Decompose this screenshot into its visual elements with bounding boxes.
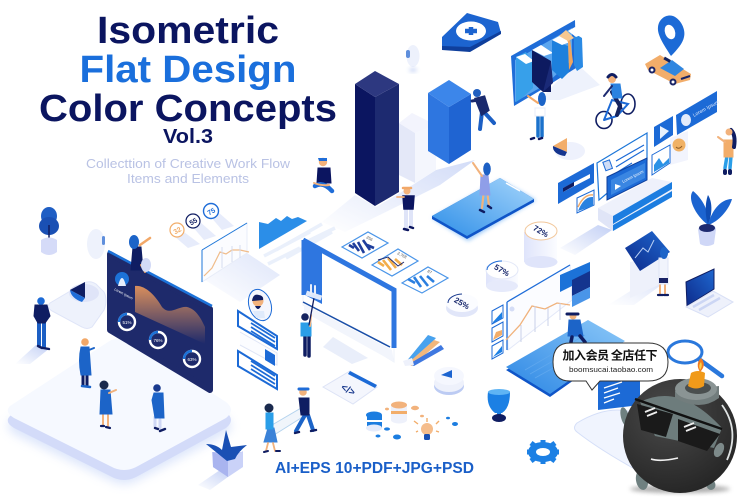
badge 32: 32 [173, 226, 183, 236]
pie chart top [553, 138, 585, 160]
chart board [492, 262, 590, 359]
title block [39, 10, 337, 186]
book orange [559, 30, 574, 70]
phone platform [432, 178, 536, 241]
sunglasses [635, 399, 722, 451]
icon: trophy cup [488, 389, 510, 422]
stat cards [342, 232, 448, 293]
blue bar [428, 80, 471, 164]
dial 2: 76% [153, 338, 163, 343]
comment cards [238, 311, 277, 389]
percent cylinder 57 [486, 261, 518, 292]
desk cabinet [560, 178, 672, 255]
card lower [238, 351, 277, 389]
kiosk chart [608, 231, 670, 305]
figure: man pushing bar [472, 89, 494, 129]
plant right [691, 191, 732, 246]
cap [675, 378, 719, 405]
heading: Isometric: Isometric [97, 10, 279, 52]
badge 75: 75 [207, 207, 217, 217]
mountain chart [259, 216, 335, 264]
badge 55: 55 [189, 217, 199, 227]
tiles right [560, 262, 590, 307]
lower-right platform [574, 378, 680, 472]
figure: man with hat [567, 312, 585, 342]
card upper [238, 311, 277, 349]
cylinder orange [391, 402, 407, 424]
white text card [597, 133, 647, 200]
figure: woman on phone [473, 162, 491, 212]
icon: cup-shaped tree left [39, 207, 59, 255]
dashboard platform [8, 338, 231, 484]
feet and ears [619, 406, 716, 491]
avatar: Lorem Ipsum [114, 287, 134, 301]
card 2: 2,768 [397, 250, 408, 260]
book 1 [516, 52, 534, 102]
heading: Color Concepts: Color Concepts [39, 88, 337, 130]
man [295, 388, 316, 433]
figure: woman atop dashboard [129, 235, 151, 272]
figure: cyclist [596, 74, 635, 128]
dial 3: 63% [187, 357, 197, 362]
heading: Vol.3: Vol.3 [163, 126, 213, 148]
percent cylinder 57: 57% [493, 263, 511, 278]
icon: gear [527, 440, 559, 464]
monitor stand [323, 337, 368, 364]
woman [264, 404, 280, 452]
percent cylinder 72 [524, 222, 558, 268]
subtitle: Collecttion of Creative Work Flow [86, 156, 291, 171]
figure: man standing [397, 188, 414, 230]
candle [688, 358, 705, 388]
laptop [686, 269, 733, 317]
icon: capsule robot top [406, 45, 420, 72]
card middle [240, 332, 277, 366]
banner: Lorem Ipsum: Lorem Ipsum [692, 99, 720, 119]
progress panel [558, 163, 594, 204]
face patch [640, 396, 722, 448]
isometric bar chart [322, 71, 475, 232]
bookshelf [511, 20, 600, 106]
icon: magnifier [668, 341, 722, 376]
card 1: 256 [366, 234, 374, 242]
mouth [651, 458, 678, 460]
image tile [652, 145, 670, 175]
percent cylinder 25 [446, 294, 478, 317]
small chart tile [577, 190, 594, 213]
board [272, 404, 309, 435]
icon tile: play [654, 116, 673, 147]
white bar [399, 113, 436, 183]
color palette fan [403, 335, 444, 366]
percent cylinder 72: 72% [532, 224, 550, 239]
figures: two people carrying board [264, 388, 316, 452]
book blue [552, 35, 570, 79]
figure: man in dark sweater [15, 297, 50, 364]
tiles left [492, 305, 503, 359]
data cylinders and blobs [366, 402, 458, 440]
format text: AI+EPS 10+PDF+JPG+PSD [275, 460, 474, 477]
icon: taxi [645, 55, 691, 86]
mascot: bomb [619, 358, 737, 493]
heading: Flat Design: Flat Design [80, 49, 296, 91]
code card: </> [339, 382, 357, 399]
speech bubble: boomsucai.taobao.com [569, 365, 653, 374]
subtitle: Items and Elements [127, 171, 250, 186]
figure: woman with tablet [100, 380, 116, 428]
tablet [506, 320, 625, 397]
card 3: 87 [427, 268, 433, 275]
icon: lightbulb [414, 418, 439, 440]
figure: woman in white coat [658, 247, 668, 295]
emoji tile [670, 131, 688, 165]
figure: avatar medallion [245, 286, 275, 324]
percent badges [170, 204, 234, 248]
cylinder blue [366, 412, 382, 432]
video panel [607, 158, 647, 200]
speech bubble [553, 343, 668, 390]
icon: location pin [658, 15, 684, 56]
figure: man with back turned [152, 384, 165, 431]
dial 1: 51% [122, 320, 132, 325]
figure: woman reading at shelf [528, 92, 546, 139]
pie platform [48, 282, 106, 328]
figure: woman in long coat [80, 338, 94, 387]
video panel: Lorem Ipsum [621, 169, 645, 184]
big monitor [303, 240, 394, 364]
figure: painter with roller [301, 285, 322, 356]
icon: disk stack [434, 367, 464, 395]
wave chart [135, 286, 205, 344]
code card [323, 371, 377, 404]
dark bar [355, 71, 399, 206]
icon: shield [442, 13, 501, 52]
percent cylinder 25: 25% [453, 296, 471, 311]
speech bubble: 加入会员 全店任下 [562, 346, 658, 364]
book dark [532, 45, 553, 92]
figure: seated man [314, 158, 332, 191]
dashboard screen [108, 251, 212, 390]
plant in pot bottom [198, 430, 247, 490]
subtitle [86, 156, 291, 186]
banner: Lorem Ipsum [676, 91, 720, 135]
book light blue [568, 27, 583, 71]
figure: woman with phone [718, 128, 735, 173]
line chart panel [202, 223, 280, 302]
icon: capsule left [87, 229, 105, 259]
